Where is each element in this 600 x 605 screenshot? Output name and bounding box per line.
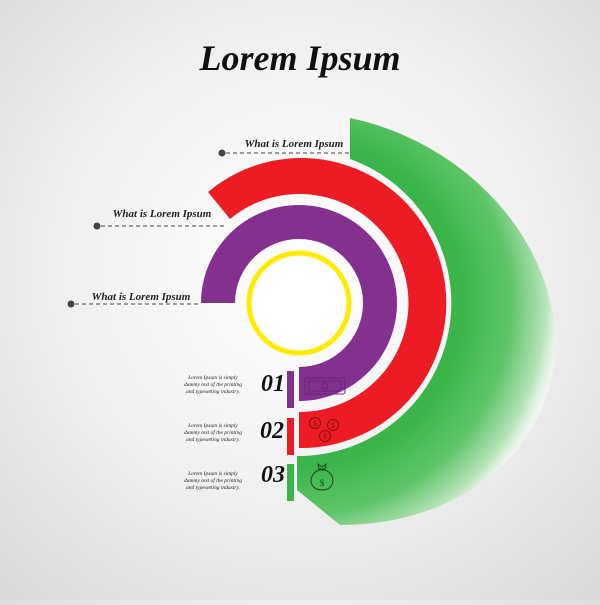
item 02: dummy text of the printing (184, 429, 242, 436)
item 03: dummy text of the printing (184, 477, 242, 484)
icon: coins (310, 418, 338, 442)
yellow ring (249, 253, 349, 353)
icon: coins: $ (313, 419, 317, 428)
item 03: and typesetting industry. (186, 485, 240, 491)
icon: money bill (305, 378, 345, 394)
title: Lorem Ipsum (198, 38, 401, 78)
item 01 (184, 371, 345, 408)
red segment (208, 158, 446, 448)
label 2 with dashed leader (94, 208, 225, 230)
icon: coins: $ (323, 432, 327, 441)
label 1 with dashed leader (218, 138, 350, 156)
label 1 with dashed leader: What is Lorem Ipsum (245, 138, 344, 150)
item 02: 02 (260, 418, 284, 444)
icon: coins: $ (331, 421, 335, 430)
item 03 (184, 462, 333, 501)
item 01: Lorem Ipsum is simply (187, 375, 238, 381)
item 01: dummy text of the printing (184, 381, 242, 388)
icon: money bag: $ (320, 478, 325, 488)
item 02 (184, 418, 338, 455)
green segment (297, 118, 555, 525)
icon: money bag (311, 464, 333, 490)
item 03: Lorem Ipsum is simply (187, 471, 238, 477)
item 01: 01 (261, 371, 285, 397)
label 3 with dashed leader: What is Lorem Ipsum (92, 291, 191, 303)
item 02: and typesetting industry. (186, 437, 240, 443)
label 3 with dashed leader (68, 291, 200, 308)
item 01: and typesetting industry. (186, 389, 240, 395)
item 03: 03 (261, 462, 285, 488)
purple segment (201, 205, 397, 401)
item 02: Lorem Ipsum is simply (187, 423, 238, 429)
label 2 with dashed leader: What is Lorem Ipsum (113, 208, 212, 220)
